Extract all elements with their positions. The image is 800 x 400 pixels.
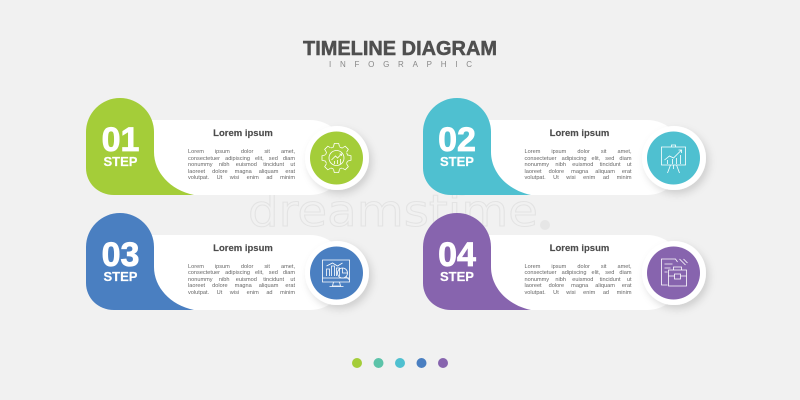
icon: briefcase and document — [661, 258, 687, 286]
text block: volutpat. Ut wisi enim ad minim — [524, 175, 632, 181]
step number: 02 — [438, 121, 476, 159]
panel: step 01 — [86, 98, 374, 196]
subtitle: INFOGRAPHIC — [329, 60, 472, 69]
text block: Lorem ipsum dolor sit amet, — [188, 149, 295, 155]
step label: STEP — [104, 268, 137, 284]
text block — [524, 264, 632, 296]
panel: step 04 — [423, 213, 712, 312]
text block: volutpat. Ut wisi enim ad minim — [524, 290, 632, 296]
text block: volutpat. Ut wisi enim ad minim — [188, 175, 295, 181]
text block: laoreet dolore magna aliquam erat — [524, 283, 632, 289]
text block: consectetuer adipiscing elit, sed diam — [524, 270, 632, 276]
step number: 03 — [102, 236, 139, 274]
text block: laoreet dolore magna aliquam erat — [524, 168, 632, 174]
text block: laoreet dolore magna aliquam erat — [188, 283, 295, 289]
text block: volutpat. Ut wisi enim ad minim — [188, 290, 295, 296]
text block: consectetuer adipiscing elit, sed diam — [188, 270, 295, 276]
icon: monitor with charts — [322, 260, 350, 286]
step label: STEP — [104, 154, 137, 169]
text block: laoreet dolore magna aliquam erat — [188, 168, 295, 174]
text block: Lorem ipsum dolor sit amet, — [188, 264, 295, 270]
text block: nonummy nibh euismod tincidunt ut — [524, 162, 632, 168]
text block — [188, 149, 295, 181]
heading: Lorem ipsum — [550, 242, 609, 254]
icon: gear with chart — [322, 144, 351, 172]
pagination dots — [352, 358, 448, 368]
text block: nonummy nibh euismod tincidunt ut — [524, 276, 632, 282]
text block: nonummy nibh euismod tincidunt ut — [188, 276, 295, 282]
text block: nonummy nibh euismod tincidunt ut — [188, 162, 295, 168]
step label: STEP — [440, 268, 474, 284]
heading: Lorem ipsum — [213, 242, 273, 254]
step number: 04 — [438, 236, 476, 274]
text block: consectetuer adipiscing elit, sed diam — [188, 156, 295, 162]
text block: consectetuer adipiscing elit, sed diam — [524, 156, 632, 162]
text block — [524, 149, 632, 181]
text block: Lorem ipsum dolor sit amet, — [524, 149, 632, 155]
text block: Lorem ipsum dolor sit amet, — [524, 264, 632, 270]
panel: step 02 — [423, 98, 712, 196]
watermark: dreamstime — [248, 186, 538, 237]
step label: STEP — [440, 154, 474, 169]
text block — [188, 264, 295, 296]
heading: Lorem ipsum — [550, 128, 609, 139]
panel: step 03 — [86, 213, 374, 312]
icon: presentation board — [661, 145, 685, 173]
heading: Lorem ipsum — [213, 128, 273, 139]
step number: 01 — [102, 121, 139, 159]
